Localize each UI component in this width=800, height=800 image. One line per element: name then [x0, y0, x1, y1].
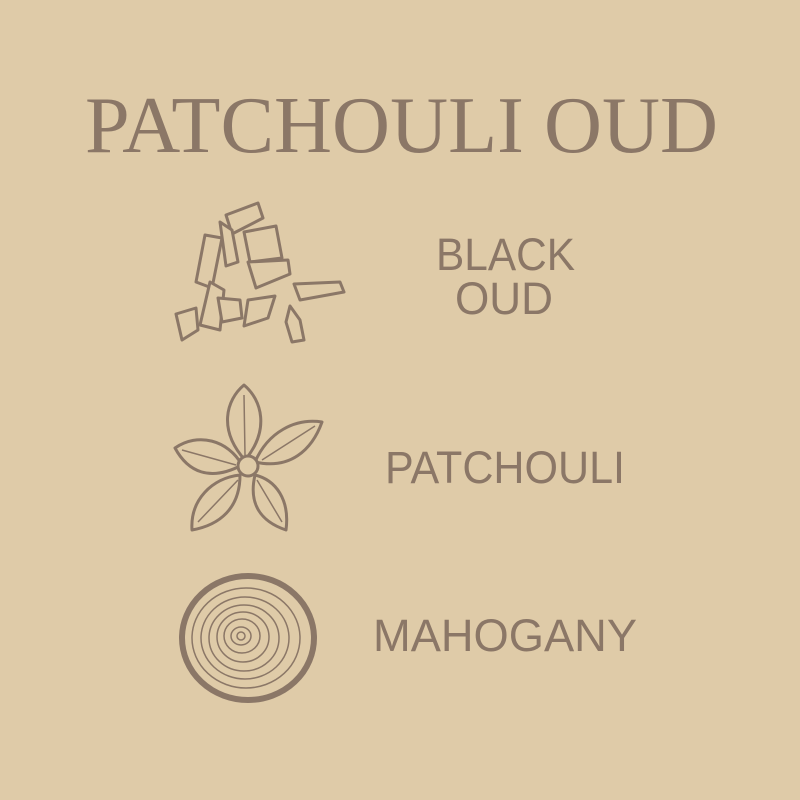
title: PATCHOULI OUD	[85, 82, 718, 170]
label: mahogany: MAHOGANY	[373, 610, 637, 661]
label: black oud	[436, 229, 575, 324]
icon: wood chips	[176, 203, 344, 342]
label: black oud: BLACK	[436, 229, 575, 280]
icon: tree ring	[182, 576, 314, 700]
icon: patchouli leaves	[175, 385, 322, 530]
label: patchouli: PATCHOULI	[385, 442, 625, 493]
label: black oud: OUD	[455, 273, 553, 324]
